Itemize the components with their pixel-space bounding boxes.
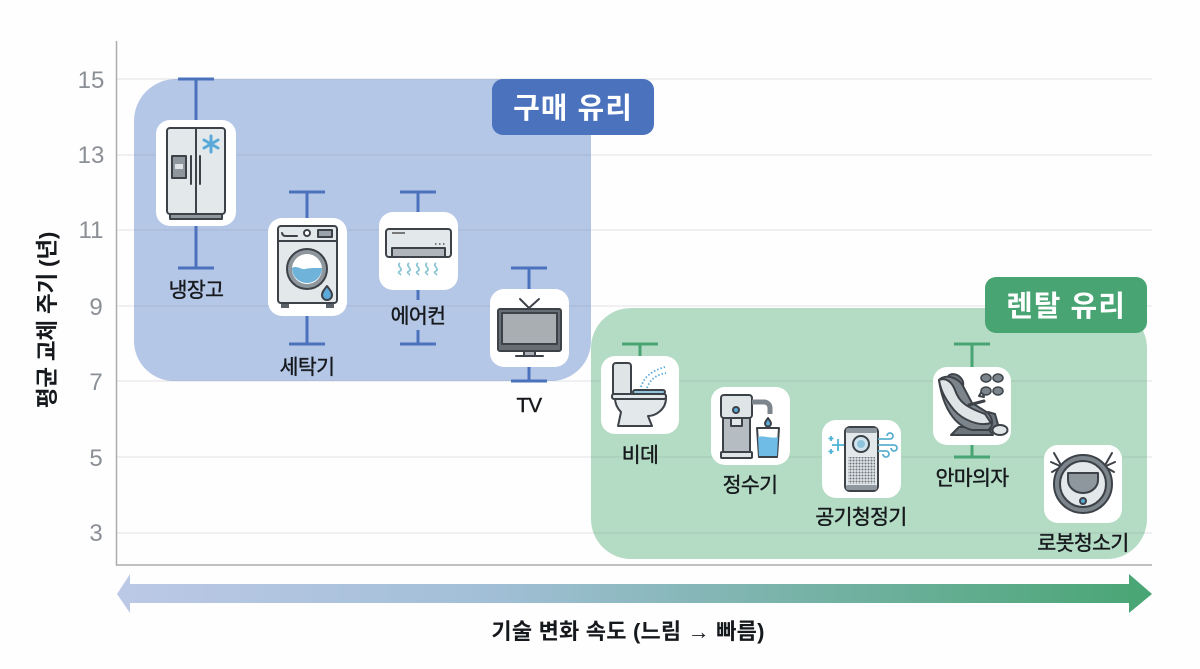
- rental tag: [985, 277, 1147, 333]
- item labels: TV: [516, 394, 542, 417]
- item labels: 냉장고: [169, 279, 223, 302]
- y axis ticks: 13: [78, 142, 104, 169]
- y axis ticks: 5: [89, 445, 103, 472]
- item labels: [169, 279, 1129, 555]
- item labels: 세탁기: [280, 356, 334, 379]
- y axis ticks: 7: [89, 369, 103, 396]
- icon: robot vacuum: [1044, 445, 1122, 523]
- icon: massage chair: [933, 367, 1011, 445]
- item labels: 공기청정기: [815, 506, 907, 529]
- item labels: 비데: [622, 444, 658, 467]
- chart axes: [116, 41, 1152, 565]
- arrow: technology change speed: [117, 574, 1152, 613]
- icon: air purifier: [822, 420, 901, 498]
- icon: television: [490, 289, 569, 367]
- icon: washing machine: [268, 218, 347, 316]
- item labels: 정수기: [723, 474, 777, 497]
- y axis title: 평균 교체 주기 (년): [35, 232, 60, 408]
- y axis ticks: 15: [78, 67, 104, 94]
- y axis ticks: 11: [79, 217, 103, 244]
- y axis ticks: 9: [89, 294, 103, 321]
- icon: water purifier: [711, 387, 790, 465]
- purchase tag: 구매 유리: [513, 92, 633, 125]
- y axis ticks: 3: [89, 520, 103, 547]
- green zone panel: [591, 308, 1147, 559]
- error bars: purchase group: [178, 79, 547, 381]
- y axis ticks: [78, 67, 104, 547]
- item labels: 로봇청소기: [1037, 532, 1129, 555]
- x axis title: 기술 변화 속도 (느림 → 빠름): [491, 619, 765, 644]
- icon: air conditioner: [379, 212, 458, 290]
- rental tag: 렌탈 유리: [1006, 290, 1126, 323]
- blue zone panel: [134, 79, 591, 381]
- item labels: 에어컨: [391, 305, 445, 328]
- purchase tag: [492, 79, 654, 135]
- icon: bidet: [601, 356, 679, 434]
- icon: refrigerator: [156, 120, 236, 226]
- item labels: 안마의자: [935, 467, 1009, 490]
- error bars: rental group: [622, 344, 990, 457]
